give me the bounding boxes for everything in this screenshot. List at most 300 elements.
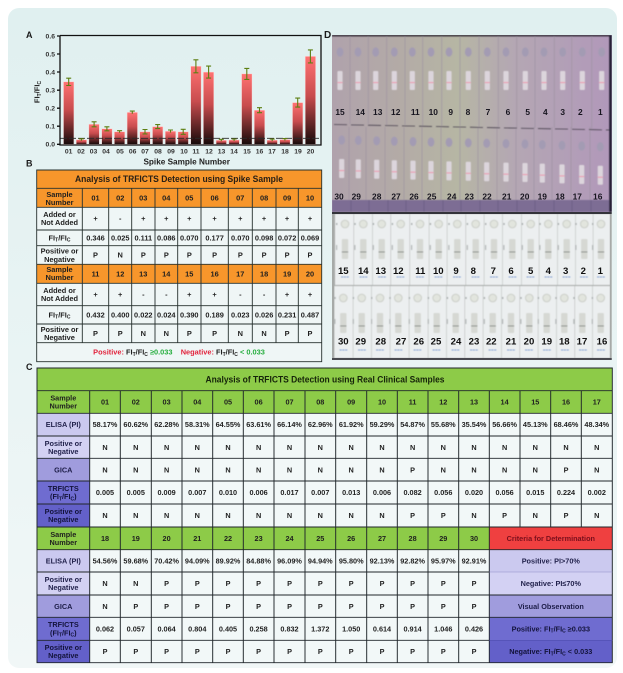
table B result row 11-20: N — [164, 329, 169, 338]
table C ELISA row 01-17: 55.68% — [431, 420, 456, 429]
x axis tick labels: 19 — [294, 149, 302, 156]
table C ELISA row 18-30: 92.91% — [462, 556, 487, 566]
table C ELISA result row 18-30: P — [195, 579, 200, 588]
table B ratio row 01-10: T — [55, 238, 58, 244]
table B ratio row 11-20: 0.390 — [180, 310, 199, 320]
strip numbers: upper row: 10 — [429, 107, 438, 117]
table B sample row 11-20: Number — [46, 273, 74, 282]
table C GICA row 01-17: N — [594, 465, 599, 474]
table B sample row 01-10: 05 — [185, 193, 193, 202]
table C TRFICTS row 01-17: 0.006 — [249, 488, 268, 497]
table C GICA row 18-30: P — [287, 602, 292, 611]
bars — [64, 56, 316, 144]
table C sample row 01-17: 07 — [285, 398, 294, 407]
table C GICA row 18-30: P — [349, 602, 354, 611]
strip numbers: upper row: 11 — [415, 266, 426, 277]
table C TRFICTS row 18-30: 1.050 — [342, 624, 360, 633]
strip numbers: upper row: 8 — [471, 266, 477, 277]
panel B: spike sample table — [37, 170, 322, 362]
table B result row 11-20: N — [141, 329, 146, 338]
strip numbers: upper row: 8 — [466, 107, 471, 117]
table C TRFICTS row 18-30: 1.372 — [311, 624, 329, 633]
table C TRFICTS result row 18-30: P — [256, 647, 261, 656]
table B result row 01-10: Positive or — [41, 246, 79, 256]
table B added row 11-20: + — [308, 290, 313, 299]
table B sample row 11-20: 18 — [260, 269, 268, 278]
table C ELISA result row 18-30: P — [164, 579, 169, 588]
table C TRFICTS row 18-30: TRFICTS — [48, 620, 79, 629]
criteria for determination block: C — [562, 651, 566, 657]
table C ELISA result row 18-30: P — [410, 579, 415, 588]
table C GICA row 18-30: P — [133, 602, 138, 611]
table B ratio row 01-10: 0.070 — [231, 234, 250, 242]
table C sample row 18-30: 26 — [347, 534, 355, 543]
x axis tick labels: 05 — [116, 149, 124, 156]
strip numbers: lower row: 16 — [597, 337, 607, 348]
criteria for determination block: < 0.033 — [566, 647, 592, 656]
table C ELISA result row 01-17: Positive or — [45, 439, 82, 448]
table B ratio row 11-20: 0.231 — [278, 310, 296, 320]
table C ELISA result row 01-17: Negative — [48, 447, 79, 456]
table B added row 01-10: Not Added — [41, 218, 79, 227]
table B ratio row 11-20: C — [67, 315, 71, 321]
table C ELISA result row 18-30: P — [349, 579, 354, 588]
x axis tick labels: 03 — [90, 149, 97, 156]
y axis tick labels: 0.3 — [46, 88, 55, 95]
table C ELISA row 01-17: 60.62% — [123, 420, 149, 429]
table B legend: T — [223, 352, 226, 358]
y axis title: T — [37, 93, 43, 96]
table C TRFICTS row 18-30: /FI — [62, 628, 71, 638]
table C ELISA result row 01-17: N — [102, 443, 108, 452]
table B added row 11-20: Added or — [43, 286, 76, 295]
table C TRFICTS row 18-30: 0.914 — [403, 624, 423, 633]
table C TRFICTS row 01-17: 0.020 — [465, 488, 483, 497]
table C TRFICTS row 01-17: /FI — [62, 492, 71, 501]
x axis tick labels: 04 — [102, 149, 110, 156]
table B result row 11-20: Positive or — [41, 325, 79, 334]
x axis tick labels: 01 — [65, 149, 73, 156]
panel letter A: A — [26, 30, 33, 40]
criteria for determination block: /FI — [554, 647, 562, 656]
table C ELISA row 18-30: 96.09% — [277, 556, 302, 566]
table C TRFICTS row 01-17: C — [71, 496, 75, 502]
strip numbers: lower row: 22 — [486, 337, 497, 348]
table B added row 01-10: + — [141, 214, 146, 223]
table B added row 11-20: - — [142, 290, 145, 299]
table C TRFICTS row 01-17: 0.006 — [373, 488, 391, 497]
table C TRFICTS row 18-30: 0.405 — [219, 624, 237, 633]
table C ELISA result row 01-17: N — [502, 443, 507, 452]
table C TRFICTS row 01-17: 0.224 — [557, 488, 576, 497]
table C GICA row 01-17: N — [379, 465, 385, 474]
table B ratio row 01-10: 0.111 — [134, 234, 152, 242]
strip numbers: lower row: 25 — [431, 337, 442, 348]
table B ratio row 11-20: /FI — [58, 310, 67, 320]
strip numbers: lower row: 26 — [413, 337, 424, 348]
table C sample row 01-17: 05 — [224, 398, 232, 407]
table C sample row 01-17: 17 — [593, 398, 601, 407]
table C title: Analysis of TRFICTS Detection using Real Clinical Samples — [206, 373, 444, 384]
table C ELISA result row 18-30: P — [380, 579, 385, 588]
strip numbers: lower row: 29 — [352, 192, 361, 202]
table B added row 11-20: - — [165, 290, 168, 299]
table C ELISA result row 18-30: Negative — [48, 583, 79, 592]
table B ratio row 01-10: 0.086 — [157, 234, 176, 242]
table B ratio row 11-20: 0.023 — [231, 310, 250, 320]
table C GICA row 18-30: P — [441, 602, 446, 611]
table B result row 01-10: P — [164, 251, 169, 260]
strip numbers: lower row: 28 — [372, 192, 382, 202]
strip numbers: lower row: 30 — [338, 337, 349, 348]
table B result row 01-10: Negative — [44, 255, 75, 264]
table C sample row 18-30: 25 — [316, 534, 324, 543]
table C sample row 18-30: 22 — [224, 534, 232, 543]
table C ELISA result row 01-17: N — [349, 443, 354, 452]
table B added row 11-20: + — [187, 290, 192, 299]
table C ELISA result row 01-17: N — [563, 443, 569, 452]
table C ELISA result row 01-17: N — [256, 443, 261, 452]
table C ELISA row 01-17: 45.13% — [523, 420, 548, 429]
table B added row 01-10: + — [308, 214, 313, 223]
table C ELISA result row 18-30: P — [226, 579, 231, 588]
criteria for determination block: ≥0.033 — [566, 624, 590, 633]
strip numbers: upper row: 11 — [411, 107, 420, 117]
strip numbers: lower row: 24 — [451, 337, 462, 348]
table B ratio row 11-20: 0.400 — [111, 310, 129, 320]
table C TRFICTS row 18-30: ) — [74, 628, 77, 638]
table C ELISA result row 18-30: P — [318, 579, 323, 588]
table C GICA row 18-30: P — [195, 602, 200, 611]
table C TRFICTS row 01-17: 0.002 — [588, 488, 606, 497]
strip numbers: upper row: 2 — [578, 107, 583, 117]
table C ELISA row 01-17: 58.17% — [93, 420, 118, 429]
table C sample row 18-30: Number — [50, 538, 77, 547]
x axis tick labels: 20 — [307, 149, 314, 156]
strip numbers: lower row: 18 — [559, 337, 570, 348]
table C TRFICTS row 18-30: 0.062 — [96, 624, 114, 633]
table C sample row 01-17: 02 — [132, 398, 140, 407]
table B ratio row 01-10: 0.346 — [86, 234, 105, 242]
panel letter D: D — [324, 30, 331, 41]
table C TRFICTS result row 01-17: N — [133, 511, 138, 520]
table B sample row 11-20: 17 — [236, 269, 244, 278]
strip numbers: upper row: 15 — [335, 107, 345, 117]
table C sample row 01-17: Number — [50, 402, 77, 410]
table B sample row 01-10: 02 — [116, 193, 124, 202]
table C TRFICTS result row 01-17: Positive or — [45, 507, 82, 516]
panel C: clinical sample table — [37, 368, 612, 663]
table C GICA row 01-17: N — [318, 465, 323, 474]
table C sample row 18-30: 20 — [163, 534, 171, 543]
table C ELISA result row 01-17: N — [594, 443, 599, 452]
table C ELISA row 01-17: 62.28% — [154, 420, 179, 429]
table C TRFICTS row 01-17: 0.017 — [280, 488, 299, 497]
strip numbers: lower row: 16 — [593, 192, 603, 202]
strip numbers: upper row: 14 — [356, 107, 365, 117]
table B ratio row 01-10: 0.069 — [301, 234, 319, 242]
table C ELISA result row 18-30 — [37, 572, 477, 595]
table B added row 11-20: - — [239, 290, 242, 299]
table C TRFICTS result row 01-17: N — [594, 511, 599, 520]
table C ELISA result row 01-17: N — [410, 443, 415, 452]
table B added row 01-10: + — [212, 214, 217, 223]
criteria for determination block: Criteria for Determination — [507, 534, 595, 543]
table B ratio row 11-20 — [49, 310, 319, 321]
criteria for determination block: Positive: PI>70% — [522, 556, 580, 566]
table C ELISA row 01-17: 35.54% — [462, 420, 487, 429]
table C TRFICTS result row 01-17: P — [441, 511, 446, 520]
table C GICA row 01-17: N — [133, 465, 138, 474]
table B added row 01-10: + — [187, 214, 192, 223]
table C ELISA result row 01-17: N — [287, 443, 292, 452]
table B added row 01-10: - — [119, 214, 122, 223]
table C GICA row 18-30: P — [472, 602, 477, 611]
panel letter B: B — [26, 158, 33, 168]
x axis tick labels: 07 — [141, 149, 149, 156]
table B legend: ≥0.033 — [148, 348, 173, 357]
table B added row 01-10: + — [164, 214, 169, 223]
table B sample row 11-20: 16 — [210, 269, 219, 278]
table B sample row 01-10: 08 — [260, 193, 268, 202]
table C TRFICTS result row 01-17: Negative — [48, 515, 79, 524]
table C TRFICTS row 01-17: 0.015 — [526, 488, 544, 497]
table C sample row 18-30: 29 — [439, 534, 447, 543]
table B sample row 01-10: 06 — [210, 193, 219, 202]
y axis title: /FI — [32, 84, 42, 93]
table C ELISA row 01-17: 66.14% — [277, 420, 302, 429]
x axis tick labels: 15 — [243, 149, 251, 156]
table C TRFICTS result row 01-17: P — [502, 511, 507, 520]
table C TRFICTS result row 18-30: P — [441, 647, 446, 656]
table B result row 11-20: N — [238, 329, 243, 338]
strip numbers: upper row: 12 — [393, 266, 404, 277]
table C GICA row 18-30: P — [318, 602, 323, 611]
table B added row 01-10: + — [238, 214, 243, 223]
table C ELISA row 01-17: ELISA (PI) — [46, 420, 81, 429]
table C TRFICTS result row 18-30: Positive or — [45, 643, 82, 652]
table C TRFICTS result row 18-30: P — [287, 647, 292, 656]
table C TRFICTS result row 01-17: N — [195, 511, 200, 520]
table C GICA row 01-17: N — [349, 465, 354, 474]
table C sample row 18-30: 19 — [132, 534, 140, 543]
table B title: Analysis of TRFICTS Detection using Spike Sample — [75, 174, 283, 184]
table B result row 11-20: P — [187, 329, 192, 338]
table C ELISA result row 18-30: N — [102, 579, 108, 588]
table B legend: < 0.033 — [238, 348, 265, 357]
table C sample row 18-30: 24 — [285, 534, 294, 543]
table C ELISA result row 18-30: P — [472, 579, 477, 588]
table C GICA row 18-30: P — [380, 602, 385, 611]
x axis tick labels: 16 — [256, 149, 263, 156]
table B ratio row 01-10: FI — [49, 234, 55, 242]
table C TRFICTS result row 18-30: P — [226, 647, 231, 656]
table C sample row 01-17: 03 — [163, 398, 171, 407]
table B title — [37, 170, 322, 188]
table C sample row 18-30: 23 — [255, 534, 263, 543]
table B ratio row 01-10: C — [67, 238, 71, 244]
table C TRFICTS result row 18-30: Negative — [48, 651, 79, 660]
table C ELISA row 18-30: 94.94% — [308, 556, 333, 566]
table C sample row 01-17: 14 — [501, 398, 510, 407]
table C TRFICTS row 01-17: 0.056 — [434, 488, 452, 497]
table C TRFICTS result row 18-30: P — [410, 647, 415, 656]
table B sample row 11-20: 20 — [306, 269, 314, 278]
table C sample row 18-30: 21 — [193, 534, 201, 543]
table C TRFICTS row 01-17: 0.082 — [403, 488, 422, 497]
table B result row 11-20: P — [308, 329, 313, 338]
table C GICA row 18-30 — [37, 595, 477, 617]
table C TRFICTS row 18-30: 0.426 — [465, 624, 483, 633]
table C ELISA row 18-30: 89.92% — [216, 556, 241, 566]
strip numbers: upper row: 6 — [506, 107, 511, 117]
table C TRFICTS row 01-17: ) — [74, 492, 77, 501]
strip numbers: lower row: 22 — [482, 192, 492, 202]
table C GICA row 18-30: P — [256, 602, 261, 611]
table C GICA row 01-17: P — [564, 465, 569, 474]
table B ratio row 01-10: 0.070 — [180, 234, 199, 242]
table C GICA row 01-17: N — [533, 465, 538, 474]
strip numbers: lower row: 20 — [520, 192, 530, 202]
table B ratio row 01-10: /FI — [58, 234, 67, 242]
table C ELISA result row 01-17: N — [225, 443, 231, 452]
table C ELISA result row 18-30: P — [287, 579, 292, 588]
table B ratio row 11-20: 0.487 — [301, 310, 319, 320]
table C TRFICTS result row 01-17: N — [225, 511, 231, 520]
table C sample row 01-17: 10 — [378, 398, 386, 407]
table C GICA row 01-17 — [37, 458, 599, 481]
table C TRFICTS row 18-30: 0.258 — [249, 624, 268, 633]
strip numbers: upper row: 9 — [453, 266, 459, 277]
strip numbers: lower row: 27 — [391, 192, 401, 202]
table C ELISA row 01-17: 59.29% — [370, 420, 395, 429]
table B result row 01-10: P — [212, 251, 217, 260]
table B result row 01-10: P — [93, 251, 98, 260]
table C TRFICTS row 01-17: 0.009 — [157, 488, 176, 497]
table B result row 11-20: P — [212, 329, 217, 338]
strip numbers: upper row: 4 — [543, 107, 548, 117]
table B result row 11-20 — [41, 325, 313, 342]
table B legend: T — [133, 352, 136, 358]
table C ELISA result row 18-30: N — [133, 579, 138, 588]
table C title — [37, 368, 612, 391]
table C TRFICTS row 01-17: 0.056 — [495, 488, 514, 497]
table C sample row 01-17: 06 — [255, 398, 263, 407]
table B sample row 01-10: 09 — [283, 193, 291, 202]
table B sample row 11-20 — [37, 264, 322, 283]
table C TRFICTS result row 01-17: N — [164, 511, 169, 520]
table C GICA row 01-17: N — [287, 465, 292, 474]
strip numbers: lower row: 18 — [555, 192, 565, 202]
table C TRFICTS result row 01-17: N — [379, 511, 385, 520]
table B sample row 01-10: Number — [46, 198, 74, 207]
table C GICA row 01-17: N — [502, 465, 507, 474]
strip numbers: upper row: 13 — [373, 107, 383, 117]
criteria for determination block: Positive: FI — [512, 624, 551, 633]
panel A: bar chart — [32, 33, 321, 166]
table B result row 11-20: P — [118, 329, 123, 338]
table C ELISA row 01-17: 63.61% — [246, 420, 271, 429]
table C GICA row 18-30: P — [410, 602, 415, 611]
table C GICA row 01-17: N — [441, 465, 446, 474]
strip numbers: lower row: 20 — [524, 337, 534, 348]
strip numbers: upper row: 12 — [391, 107, 401, 117]
table C ELISA result row 01-17: N — [318, 443, 323, 452]
table C sample row 01-17 — [37, 391, 612, 413]
table C sample row 01-17: 09 — [347, 398, 355, 407]
table C ELISA result row 18-30: Positive or — [45, 575, 82, 584]
table B ratio row 11-20: 0.189 — [205, 310, 224, 320]
x axis tick labels: 08 — [154, 149, 162, 156]
table B sample row 11-20: Sample — [46, 265, 73, 274]
y axis title: C — [37, 80, 43, 84]
table C GICA row 01-17: N — [471, 465, 477, 474]
table C ELISA row 01-17: 56.66% — [492, 420, 517, 429]
photo: strips under UV-style light — [332, 35, 612, 212]
table C TRFICTS row 18-30: 0.614 — [373, 624, 392, 633]
strip numbers: upper row: 5 — [528, 266, 534, 277]
table B result row 01-10: P — [285, 251, 290, 260]
table B ratio row 01-10 — [49, 234, 319, 244]
table C TRFICTS row 01-17: 0.013 — [342, 488, 360, 497]
table C TRFICTS row 01-17 — [37, 481, 606, 504]
table C sample row 18-30: 30 — [470, 534, 478, 543]
y axis tick labels: 0.4 — [46, 69, 55, 76]
table B result row 01-10: P — [187, 251, 192, 260]
table C sample row 18-30: 27 — [378, 534, 386, 543]
x axis tick labels: 13 — [218, 149, 225, 156]
table C TRFICTS result row 18-30 — [37, 640, 477, 663]
strip numbers: upper row: 14 — [358, 266, 369, 277]
table C TRFICTS result row 01-17: N — [102, 511, 108, 520]
table B sample row 11-20: 15 — [185, 269, 193, 278]
strip numbers: lower row: 23 — [469, 337, 479, 348]
table B ratio row 01-10: 0.177 — [205, 234, 224, 242]
table B sample row 01-10: Sample — [46, 190, 73, 199]
strip numbers: lower row: 25 — [427, 192, 437, 202]
table C TRFICTS row 01-17: 0.010 — [219, 488, 237, 497]
table C TRFICTS row 01-17: T — [59, 496, 62, 502]
table C sample row 01-17: 01 — [101, 398, 109, 407]
table C sample row 01-17: 15 — [531, 398, 539, 407]
x axis tick labels: 14 — [230, 149, 238, 156]
criteria for determination block: T — [551, 651, 554, 657]
table B added row 11-20: + — [118, 290, 123, 299]
strip numbers: lower row: 21 — [502, 192, 512, 202]
table B result row 11-20: P — [285, 329, 290, 338]
table B result row 01-10: P — [141, 251, 146, 260]
table C ELISA row 01-17: 48.34% — [584, 420, 610, 429]
table C sample row 01-17: 04 — [193, 398, 202, 407]
y axis title: FI — [32, 96, 42, 103]
table B added row 01-10: Added or — [43, 210, 76, 219]
table C TRFICTS row 18-30: 1.046 — [434, 624, 452, 633]
table B sample row 11-20: 19 — [283, 269, 291, 278]
table C ELISA row 18-30: ELISA (PI) — [46, 556, 81, 566]
strip numbers: upper row: 5 — [525, 107, 530, 117]
x axis tick labels: 06 — [129, 149, 137, 156]
table C sample row 01-17: 16 — [562, 398, 570, 407]
table B sample row 11-20: 13 — [139, 269, 147, 278]
table C ELISA row 18-30: 95.80% — [339, 556, 364, 566]
table C ELISA row 01-17: 68.46% — [554, 420, 579, 429]
table B added row 11-20: + — [93, 290, 98, 299]
criteria for determination block — [489, 527, 612, 663]
table C ELISA result row 01-17: N — [471, 443, 477, 452]
table C ELISA row 01-17: 58.31% — [185, 420, 210, 429]
table B legend: Positive: FI — [93, 348, 133, 357]
table C ELISA row 01-17: 62.96% — [308, 420, 333, 429]
